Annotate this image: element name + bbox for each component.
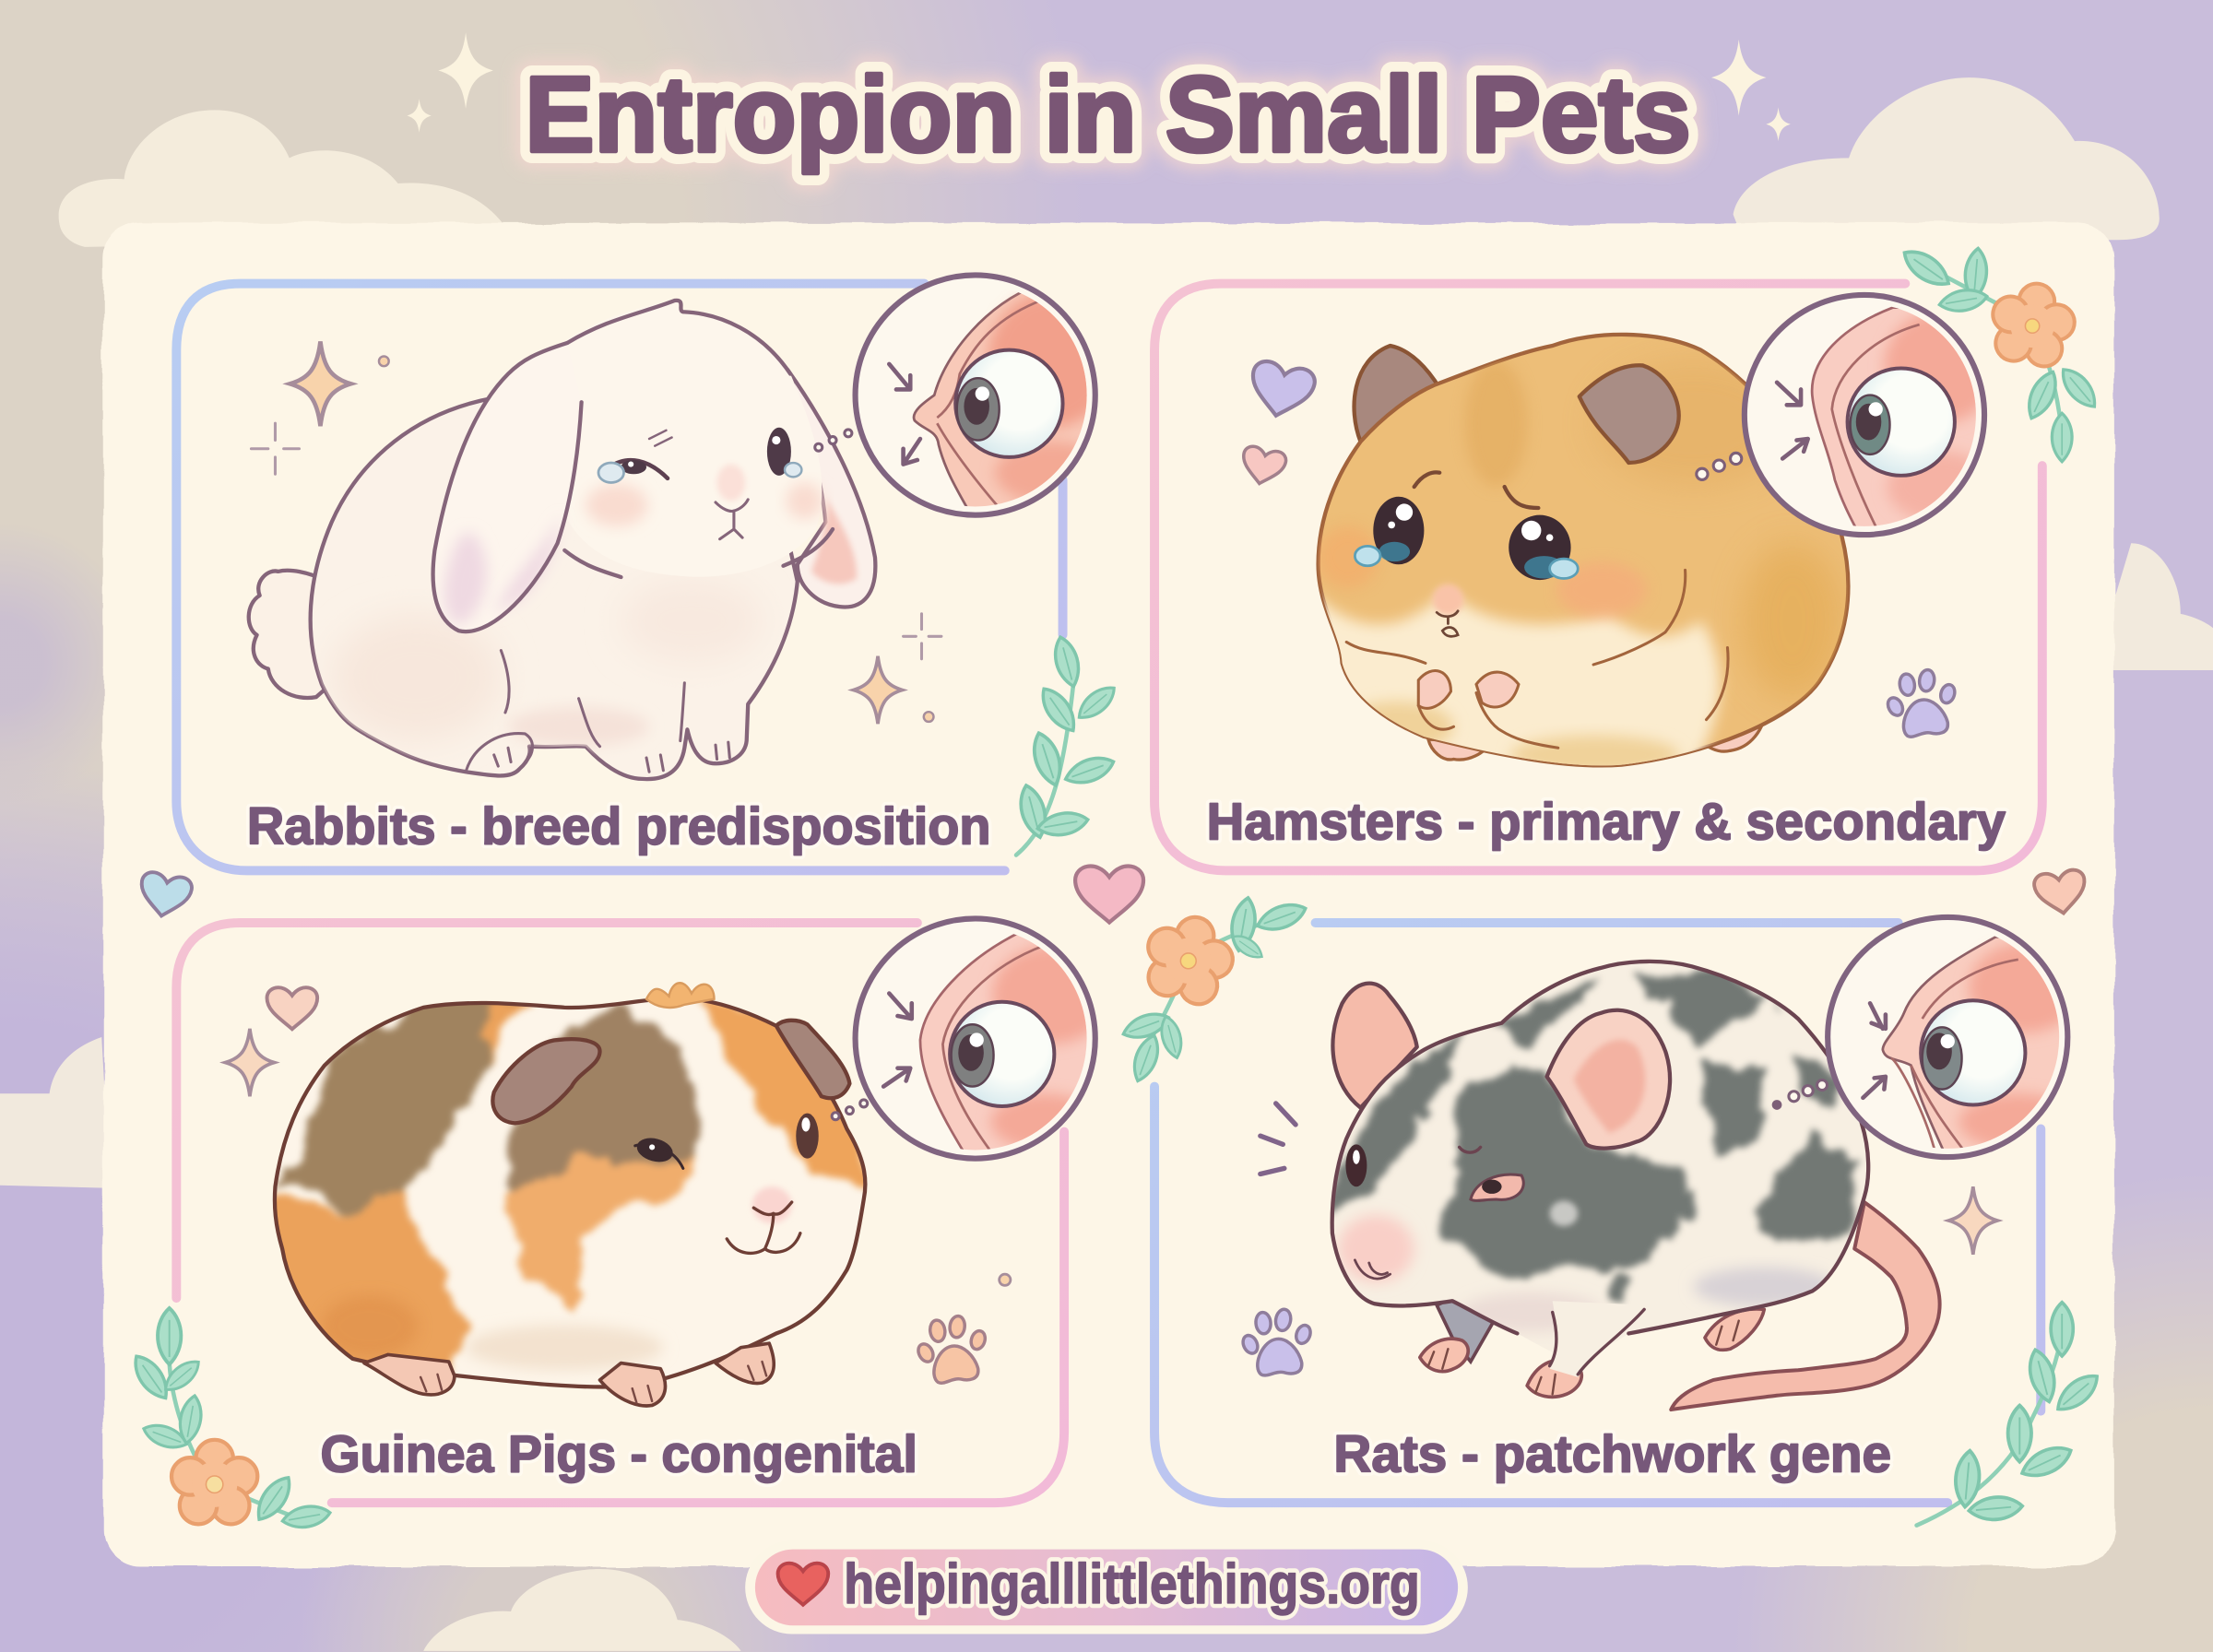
icon: pink heart bbox=[1075, 867, 1143, 923]
icon: peach heart bbox=[2033, 868, 2089, 916]
label: rabbits: Rabbits - breed predisposition bbox=[247, 797, 990, 856]
title sparkles bbox=[407, 32, 1791, 141]
icon: red heart bbox=[778, 1564, 828, 1605]
flower and vine: hamster panel bbox=[1899, 243, 2102, 462]
connector dots bbox=[815, 430, 852, 451]
connector dots bbox=[1773, 1080, 1828, 1108]
magnifier: hamster eye bbox=[1697, 295, 2004, 537]
arrows: guinea pig eyelid bbox=[883, 994, 912, 1087]
panel: rabbits bbox=[176, 275, 1120, 870]
label: hamsters: Hamsters - primary & secondary bbox=[1207, 794, 2006, 852]
label: guinea pigs: Guinea Pigs - congenital bbox=[320, 1425, 917, 1483]
footer url: helpingalllittlethings.org bbox=[844, 1552, 1420, 1615]
arrows: rat eyelid bbox=[1863, 1003, 1886, 1098]
illustration: rat bbox=[1260, 962, 1940, 1410]
label: rats: Rats - patchwork gene bbox=[1333, 1425, 1891, 1483]
icon: blue heart bbox=[136, 870, 194, 920]
panel: guinea pigs bbox=[128, 918, 1115, 1531]
label: hamsters: Hamsters - primary & secondary bbox=[1207, 794, 2006, 852]
panel: hamsters bbox=[1154, 243, 2102, 870]
panel border: rabbits bbox=[176, 284, 1063, 870]
label: rabbits: Rabbits - breed predisposition bbox=[247, 797, 990, 856]
arrows: hamster eyelid bbox=[1777, 383, 1808, 458]
magnifier: rabbit eye bbox=[815, 275, 1115, 515]
title: Entropion in Small Pets bbox=[525, 54, 1691, 174]
illustration: hamster bbox=[1312, 335, 1848, 790]
illustration: guinea pig bbox=[261, 983, 878, 1406]
arrows: rabbit eyelid bbox=[889, 364, 920, 465]
label: rats: Rats - patchwork gene bbox=[1333, 1425, 1891, 1483]
label: guinea pigs: Guinea Pigs - congenital bbox=[320, 1425, 917, 1483]
vine: rabbit panel bbox=[1015, 634, 1120, 856]
title: Entropion in Small Pets bbox=[525, 54, 1691, 174]
decorations: rat panel bbox=[1238, 1186, 1997, 1377]
panel border: rats bbox=[1154, 923, 2041, 1503]
flower and vine: guinea pig panel bbox=[128, 1308, 332, 1531]
vine: rat panel bottom bbox=[1917, 1303, 2104, 1526]
decorations: hamster panel bbox=[1238, 359, 1963, 740]
connector dots bbox=[832, 1100, 868, 1120]
decorations: guinea pig panel bbox=[225, 987, 1011, 1386]
illustration: rabbit bbox=[249, 301, 875, 779]
magnifier: rat eye bbox=[1773, 917, 2089, 1157]
panel: rats bbox=[1120, 896, 2104, 1526]
footer pill bbox=[745, 1540, 1468, 1634]
magnifier: guinea pig eye bbox=[832, 918, 1115, 1159]
connector dots bbox=[1697, 453, 1742, 479]
panel border: guinea pigs bbox=[176, 923, 1064, 1503]
title: Entropion in Small Pets bbox=[525, 54, 1691, 174]
decorations: rabbit panel bbox=[251, 341, 941, 724]
flower and vine: rat panel top bbox=[1120, 896, 1309, 1084]
panel border: hamsters bbox=[1154, 284, 2042, 870]
main cream panel bbox=[103, 223, 2114, 1566]
footer url: helpingalllittlethings.org bbox=[844, 1552, 1420, 1615]
